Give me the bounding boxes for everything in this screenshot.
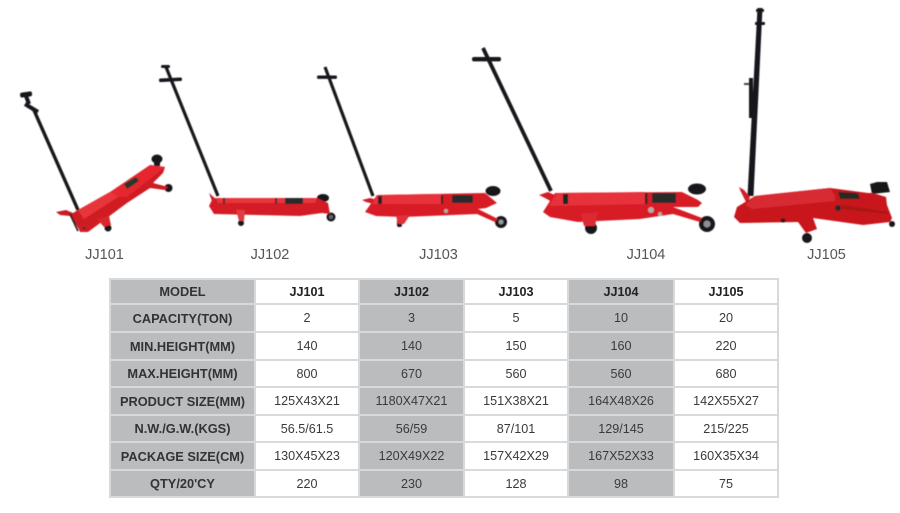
row: capacity: 3 (408, 311, 415, 325)
row: capacity: 10 (614, 311, 628, 325)
row: capacity: CAPACITY(TON) (133, 310, 232, 326)
row: product size: 142X55X27 (693, 394, 759, 408)
row: minimum height: 160 (610, 339, 632, 353)
row: capacity: 5 (512, 311, 520, 325)
row: maximum height: 800 (296, 366, 318, 380)
row: model: JJ101 (289, 284, 325, 298)
row: quantity per 20 foot container: 75 (719, 476, 733, 490)
row: product size: PRODUCT SIZE(MM) (120, 394, 245, 408)
caption JJ105: JJ105 (807, 247, 846, 263)
jack JJ102 (159, 65, 336, 226)
row: product size: 164X48X26 (588, 394, 654, 408)
row: minimum height: MIN.HEIGHT(MM) (130, 338, 235, 354)
row: net and gross weight: 56/59 (396, 422, 427, 436)
jack JJ103 (317, 67, 507, 228)
row: product size: 1180X47X21 (376, 394, 447, 408)
specification table (109, 278, 779, 498)
row: maximum height: 560 (505, 366, 526, 380)
row: model: JJ103 (498, 284, 534, 298)
row: minimum height: 140 (296, 339, 318, 353)
row: product size: 151X38X21 (483, 394, 549, 408)
row: package size: 167X52X33 (588, 449, 654, 463)
row: maximum height (111, 361, 736, 386)
row: net and gross weight: 129/145 (598, 422, 644, 436)
row: package size: 160X35X34 (693, 449, 759, 463)
row: maximum height: MAX.HEIGHT(MM) (127, 366, 238, 381)
row: minimum height (111, 333, 736, 359)
row: capacity: 20 (719, 311, 733, 325)
jack JJ105 (734, 8, 895, 243)
jack JJ104 (472, 48, 715, 234)
row: quantity per 20 foot container: 128 (505, 476, 526, 490)
row: capacity (111, 305, 733, 331)
row: minimum height: 150 (505, 339, 526, 353)
row: quantity per 20 foot container: 98 (614, 476, 628, 490)
row: net and gross weight: N.W./G.W.(KGS) (134, 421, 230, 436)
row: product size: 125X43X21 (274, 394, 340, 408)
row: net and gross weight: 215/225 (703, 422, 749, 436)
row: minimum height: 220 (715, 339, 736, 353)
caption JJ101: JJ101 (85, 247, 124, 263)
row: net and gross weight: 56.5/61.5 (281, 422, 333, 436)
row: model (111, 280, 759, 496)
row: capacity: 2 (303, 311, 310, 325)
caption JJ102: JJ102 (251, 247, 289, 263)
row: model: JJ102 (394, 284, 429, 298)
row: package size: PACKAGE SIZE(CM) (121, 448, 244, 464)
jack JJ101 (20, 91, 172, 232)
row: package size: 120X49X22 (379, 449, 444, 463)
row: maximum height: 680 (715, 366, 736, 380)
caption JJ104: JJ104 (627, 247, 665, 263)
row: package size (111, 443, 759, 469)
row: model: JJ105 (708, 284, 744, 298)
row: package size: 130X45X23 (274, 449, 340, 463)
row: quantity per 20 foot container: 230 (401, 476, 422, 490)
row: package size: 157X42X29 (483, 449, 549, 463)
row: net and gross weight: 87/101 (497, 422, 535, 436)
row: quantity per 20 foot container (111, 471, 733, 496)
row: maximum height: 670 (401, 366, 422, 380)
row: product size (111, 388, 759, 414)
row: minimum height: 140 (401, 339, 422, 353)
row: quantity per 20 foot container: 220 (296, 476, 318, 490)
row: quantity per 20 foot container: QTY/20'CY (150, 476, 215, 491)
row: maximum height: 560 (610, 366, 632, 380)
row: model: MODEL (159, 284, 206, 299)
caption JJ103: JJ103 (419, 247, 458, 263)
row: model: JJ104 (603, 284, 639, 298)
row: net and gross weight (111, 416, 749, 441)
